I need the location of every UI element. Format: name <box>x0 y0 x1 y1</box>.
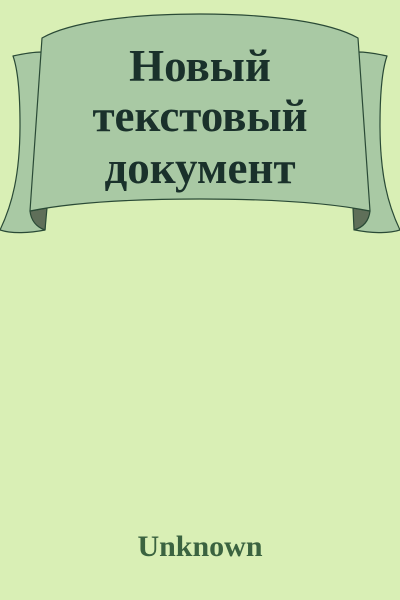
title: Новый <box>129 41 271 91</box>
right ribbon tail <box>354 52 400 233</box>
title: документ <box>104 143 296 193</box>
banner ribbon <box>0 14 400 233</box>
main banner <box>30 14 370 211</box>
left ribbon tail <box>0 52 46 233</box>
left fold shadow <box>30 208 47 230</box>
title: текстовый <box>92 91 308 141</box>
title <box>92 41 308 193</box>
author: Unknown <box>137 530 263 563</box>
right fold shadow <box>353 208 370 230</box>
